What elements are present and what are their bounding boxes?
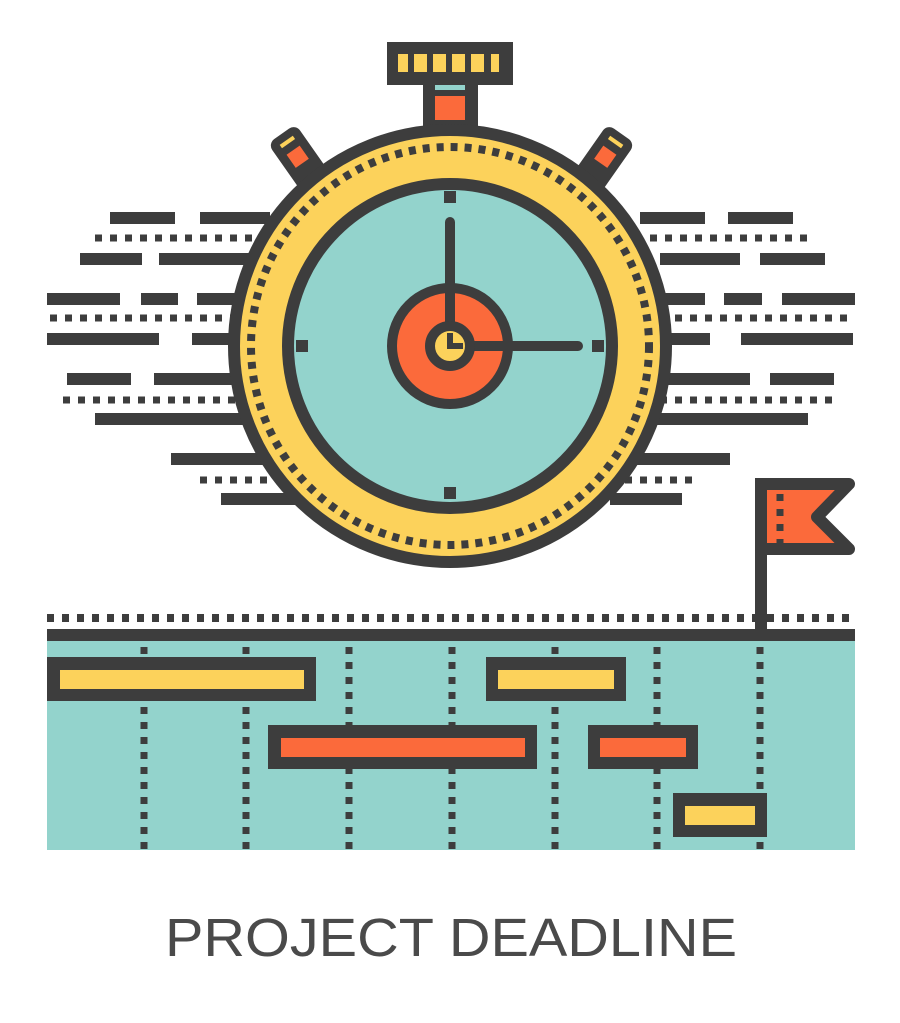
center dial [392,288,508,404]
flag [755,478,849,636]
task bars [47,657,767,837]
speed lines left [47,212,301,505]
speed lines right [610,212,855,505]
side buttons [268,124,635,196]
title: PROJECT DEADLINE [165,908,737,968]
stopwatch body [234,130,666,562]
stopwatch crown [387,42,513,130]
ticks [296,191,604,499]
gantt chart [47,618,855,850]
